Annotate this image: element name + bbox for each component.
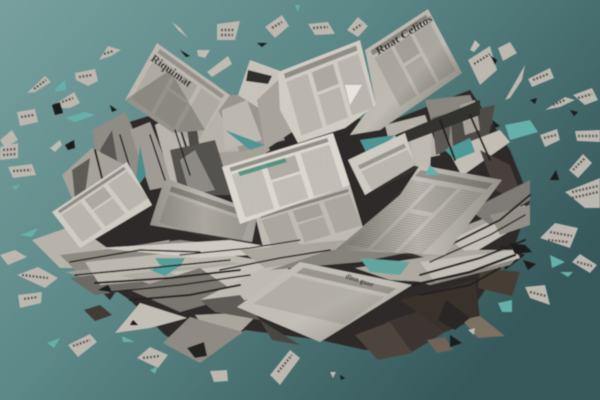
brown shadow sheets below pile: [84, 245, 525, 360]
paper: centre front sheet: [222, 133, 350, 224]
paper: top right large sheet: [350, 9, 462, 135]
paper: upper left headline sheet: Riquimat: [148, 53, 194, 90]
back crumpled sheets: [62, 60, 525, 212]
paper: top right large sheet: Ruat Celitos: [374, 13, 435, 58]
paper: right large sheet: [335, 165, 502, 257]
paper: right small sheet: [348, 133, 419, 195]
paper: centre right sheet: [255, 185, 366, 255]
stacked layer strips: [32, 180, 530, 363]
dark pile base: [62, 90, 530, 355]
paper: large lower front sheet: [237, 262, 412, 342]
dark gaps between sheets: [70, 115, 530, 300]
paper: left front sheet: [52, 162, 152, 248]
paper: lower mid-left sheet: [150, 178, 258, 249]
paper: large lower front sheet: dinn guar: [344, 272, 375, 289]
paper: top centre sheet: [278, 40, 376, 143]
paper: upper left headline sheet: [125, 43, 230, 144]
